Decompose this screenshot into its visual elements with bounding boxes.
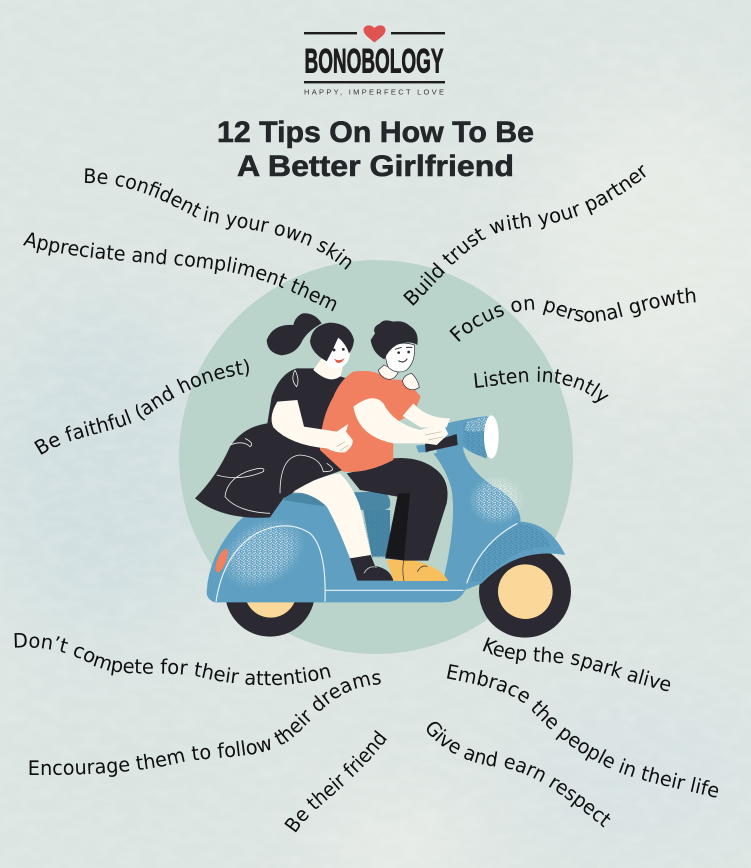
- tail light: [213, 547, 230, 574]
- title: A Better Girlfriend: [237, 150, 514, 183]
- title: 12 Tips On How To Be: [217, 116, 534, 149]
- boy: shirt: [320, 371, 421, 472]
- tip: Encourage them to follow their dreams: Encourage them to follow their dreams: [30, 673, 381, 777]
- tip: Be faithful (and honest): Be faithful (and honest): [34, 359, 249, 455]
- logo wordmark: BONOBOLOGY: [304, 42, 444, 80]
- body trim lines: [216, 523, 517, 602]
- stipple: rear fender: [223, 520, 304, 588]
- front wheel: [479, 546, 571, 638]
- boy: far arm: [403, 403, 450, 427]
- logo rule: top left: [304, 32, 357, 34]
- tip: Appreciate and compliment them: Appreciate and compliment them: [23, 232, 336, 312]
- boy: shoes: [387, 558, 448, 581]
- logo tagline: HAPPY, IMPERFECT LOVE: [304, 88, 444, 96]
- girl: dress skirt and torso: [195, 368, 347, 518]
- boy: neck: [378, 365, 398, 379]
- tip: Give and earn respect: Give and earn respect: [426, 722, 610, 828]
- dress decorative loops: [217, 370, 333, 513]
- circle backdrop: [179, 260, 573, 654]
- handlebar and headlight: [416, 415, 499, 459]
- girl: hand on shoulder: [403, 373, 419, 390]
- tip: Listen intently: Listen intently: [474, 366, 609, 404]
- girl: leg: [293, 473, 372, 558]
- icon: heart: [364, 25, 386, 42]
- tip: Don't compete for their attention: Don’t compete for their attention: [14, 633, 331, 686]
- girl: head: [310, 323, 354, 368]
- girl: neck: [313, 358, 343, 379]
- rear wheel: [225, 547, 315, 637]
- seat: [283, 492, 390, 511]
- girl: sock and shoe: [350, 555, 393, 581]
- logo: Bonobology: [304, 25, 445, 96]
- illustration: couple on a scooter: [195, 313, 571, 638]
- tip: Keep the spark alive: Keep the spark alive: [482, 637, 670, 692]
- tip: Be their friend: Be their friend: [284, 730, 387, 832]
- tip: Focus on personal growth: Focus on personal growth: [449, 288, 696, 342]
- boy: near arm and hand: [353, 398, 448, 445]
- title: [217, 116, 534, 183]
- boy: head: [371, 320, 418, 372]
- boy: trousers: [347, 458, 448, 561]
- tip: Embrace the people in their life: Embrace the people in their life: [447, 664, 718, 798]
- scooter body: [207, 450, 565, 602]
- logo rule: bottom: [304, 81, 445, 83]
- logo rule: top right: [391, 32, 445, 34]
- tip: Build trust with your partner: Build trust with your partner: [403, 164, 646, 306]
- stipple: leg shield: [470, 477, 523, 524]
- girl: arm and hand: [272, 400, 353, 452]
- girl: ponytail: [267, 313, 322, 355]
- tip: Be confident in your own skin: Be confident in your own skin: [85, 168, 352, 270]
- stipple: front fender: [470, 524, 550, 582]
